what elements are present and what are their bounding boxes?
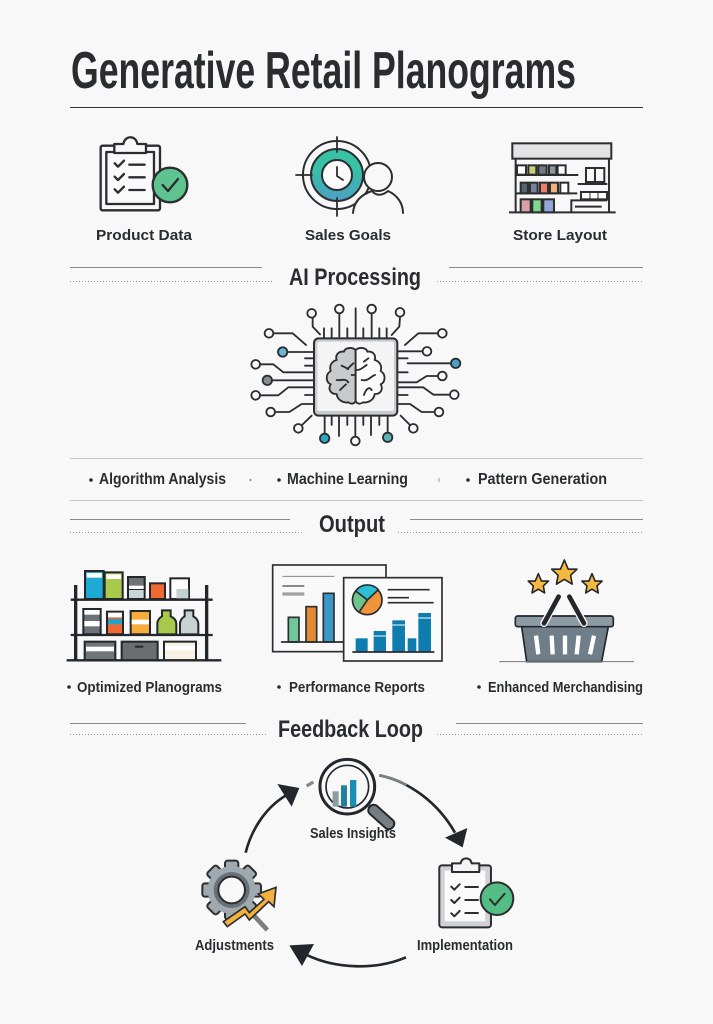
icon: performance reports <box>273 565 442 661</box>
label: store layout: Store Layout <box>513 227 607 244</box>
icon: sales goals target and person <box>296 137 403 216</box>
label: optimized planograms: Optimized Planograms <box>77 679 222 696</box>
list: AI processing bullets: Pattern Generation <box>478 471 607 488</box>
heading: Feedback Loop: Feedback Loop <box>278 716 423 743</box>
list: AI processing bullets: Machine Learning <box>287 471 408 488</box>
label: sales goals: Sales Goals <box>305 227 391 244</box>
icon: adjustments gear with arrow <box>202 861 276 930</box>
icon: AI chip with brain <box>251 305 460 445</box>
heading: Output: Output <box>319 511 385 538</box>
list: AI processing bullets: Algorithm Analysis <box>99 471 226 488</box>
label: enhanced merchandising: Enhanced Merchandising <box>488 679 643 696</box>
label: sales insights: Sales Insights <box>310 826 396 842</box>
icon: store layout <box>509 143 616 212</box>
arrow: implementation to adjustments <box>289 944 406 966</box>
list: AI processing bullets <box>70 458 643 500</box>
icon: implementation clipboard <box>439 858 513 927</box>
label: product data: Product Data <box>96 227 193 244</box>
arrow: adjustments to insights <box>246 784 299 853</box>
label: adjustments: Adjustments <box>195 938 274 954</box>
icon: sales insights magnifier <box>307 759 396 831</box>
feedback loop diagram <box>195 759 513 966</box>
heading: AI Processing: AI Processing <box>289 264 421 291</box>
icon: optimized planogram shelf <box>67 571 221 660</box>
icon: merchandising basket with stars <box>499 560 634 662</box>
label: performance reports: Performance Reports <box>289 679 425 696</box>
label: implementation: Implementation <box>417 938 513 954</box>
icon: product data clipboard <box>101 137 187 210</box>
arrow: insights to implementation <box>379 775 467 847</box>
